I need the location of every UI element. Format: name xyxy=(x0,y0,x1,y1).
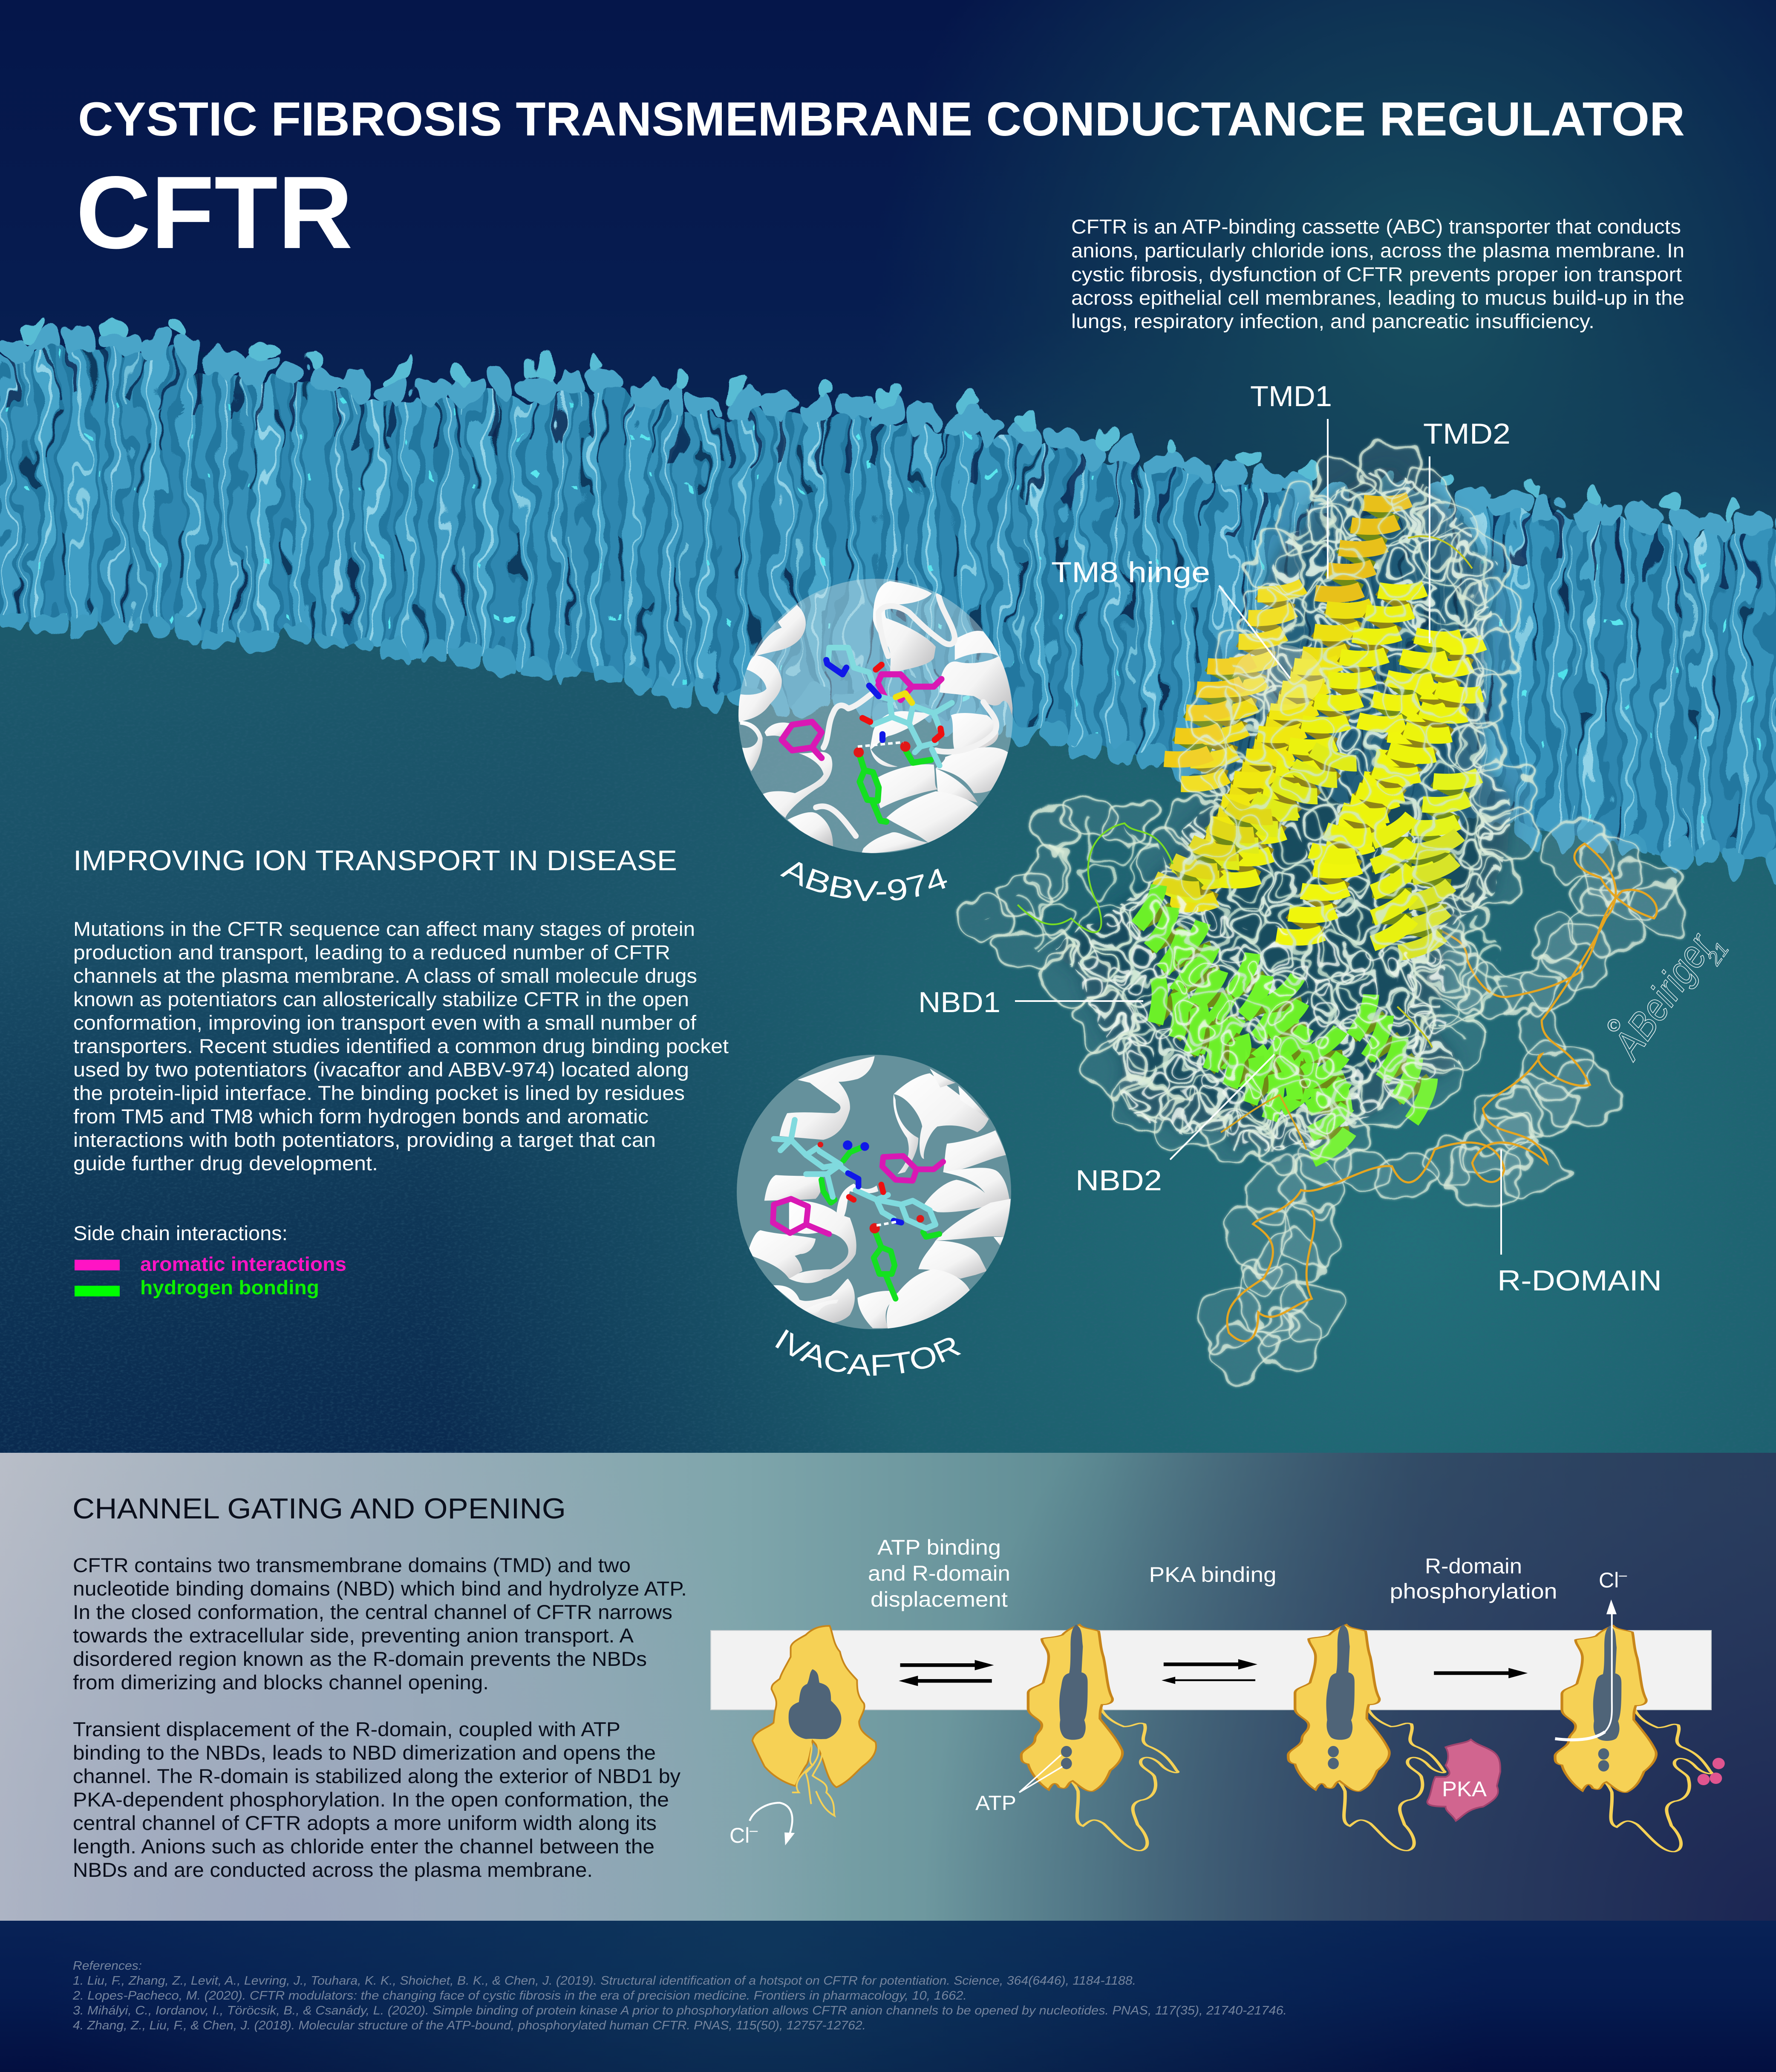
body text: from TM5 and TM8 which form hydrogen bonds and aromatic xyxy=(73,1105,649,1128)
body text: disordered region known as the R-domain prevents the NBDs xyxy=(73,1648,647,1670)
body text: channel. The R-domain is stabilized along the exterior of NBD1 by xyxy=(73,1765,681,1787)
panel: improving ion transport xyxy=(73,845,729,1299)
diagram: closed state xyxy=(752,1626,876,1816)
title: CYSTIC FIBROSIS TRANSMEMBRANE CONDUCTANCE REGULATOR xyxy=(78,92,1685,146)
intro paragraph: across epithelial cell membranes, leading to mucus build-up in the xyxy=(1071,286,1684,309)
TMD helices xyxy=(1155,481,1484,959)
body text: conformation, improving ion transport even with a small number of xyxy=(73,1011,697,1034)
intro paragraph: cystic fibrosis, dysfunction of CFTR prevents proper ion transport xyxy=(1071,263,1682,286)
diagram labels xyxy=(729,1535,1627,1847)
references: 4. Zhang, Z., Liu, F., & Chen, J. (2018). Molecular structure of the ATP-bound, phosphorylated human CFTR. PNAS, 115(50), 12757-12762. xyxy=(73,2019,866,2032)
diagram labels: – xyxy=(1619,1567,1627,1583)
body text: known as potentiators can allosterically stabilize CFTR in the open xyxy=(73,988,689,1010)
body text: Transient displacement of the R-domain, coupled with ATP xyxy=(73,1718,620,1740)
diagram labels: Cl xyxy=(1599,1568,1619,1592)
diagram labels: PKA xyxy=(1442,1777,1487,1801)
body text xyxy=(73,918,729,1175)
signature: ABeiriger xyxy=(1604,925,1722,1068)
structure labels and leader lines: NBD2 xyxy=(1075,1164,1162,1197)
body text: In the closed conformation, the central channel of CFTR narrows xyxy=(73,1601,672,1623)
body text: CFTR contains two transmembrane domains (TMD) and two xyxy=(73,1554,631,1576)
diagram labels: Cl xyxy=(729,1824,750,1847)
callout: ivacaftor binding pocket xyxy=(737,1055,1011,1382)
body text: NBDs and are conducted across the plasma membrane. xyxy=(73,1858,593,1881)
intro paragraph: CFTR is an ATP-binding cassette (ABC) transporter that conducts xyxy=(1071,215,1681,238)
legend xyxy=(73,1222,346,1299)
white protein ribbons xyxy=(738,581,1013,853)
body text: guide further drug development. xyxy=(73,1152,378,1175)
signature: 21 xyxy=(1702,938,1733,970)
ABBV-974 ligand and side chains xyxy=(781,648,952,822)
CFTR protein structure xyxy=(963,443,1733,1379)
intro paragraph: lungs, respiratory infection, and pancreatic insufficiency. xyxy=(1071,310,1594,332)
body text: binding to the NBDs, leads to NBD dimerization and opens the xyxy=(73,1741,656,1764)
membrane band xyxy=(711,1630,1711,1710)
diagram labels: R-domain xyxy=(1425,1554,1522,1578)
references: 1. Liu, F., Zhang, Z., Levit, A., Levring, J., Touhara, K. K., Shoichet, B. K., & Chen, J. (2019). Structural identification of a hotspot on CFTR for potentiation. Science, 364(6446), 1184-1188. xyxy=(73,1974,1136,1988)
references: 2. Lopes-Pacheco, M. (2020). CFTR modulators: the changing face of cystic fibrosis in the era of precision medicine. Frontiers in pharmacology, 10, 1662. xyxy=(72,1989,967,2003)
legend: Side chain interactions: xyxy=(73,1222,288,1244)
body text: the protein-lipid interface. The binding pocket is lined by residues xyxy=(73,1082,685,1104)
heading: CHANNEL GATING AND OPENING xyxy=(72,1492,566,1525)
background xyxy=(0,0,1776,1457)
callout: ABBV-974 binding pocket xyxy=(738,579,1013,908)
structure labels and leader lines: TMD2 xyxy=(1423,418,1511,450)
ivacaftor label: IVACAFTOR xyxy=(769,1322,966,1382)
R-domain surface xyxy=(1196,821,1685,1379)
diagram: PKA-bound state xyxy=(1288,1625,1500,1850)
diagram labels: ATP binding xyxy=(877,1535,1001,1559)
diagram labels: displacement xyxy=(871,1587,1008,1611)
white protein ribbons xyxy=(749,1056,1011,1329)
acronym: CFTR xyxy=(76,155,353,270)
references xyxy=(72,1959,1287,2032)
body text: central channel of CFTR adopts a more uniform width along its xyxy=(73,1812,657,1834)
body text: nucleotide binding domains (NBD) which bind and hydrolyze ATP. xyxy=(73,1577,687,1600)
equilibrium arrows xyxy=(899,1659,1528,1686)
body text: transporters. Recent studies identified a common drug binding pocket xyxy=(73,1035,729,1057)
R-domain chain xyxy=(1227,844,1657,1341)
structure labels and leader lines: NBD1 xyxy=(918,986,1000,1019)
body text: length. Anions such as chloride enter the channel between the xyxy=(73,1835,654,1858)
diagram labels: and R-domain xyxy=(868,1561,1010,1585)
heading: IMPROVING ION TRANSPORT IN DISEASE xyxy=(73,845,677,877)
structure labels and leader lines: TM8 hinge xyxy=(1051,556,1210,589)
body text: Mutations in the CFTR sequence can affect many stages of protein xyxy=(73,918,695,940)
TM8 hinge highlight xyxy=(1234,644,1323,711)
thin backbone loops xyxy=(1018,536,1472,1149)
diagram: ATP-bound state xyxy=(1019,1625,1178,1850)
protein surface outline xyxy=(963,443,1536,1172)
references: References: xyxy=(73,1959,142,1973)
body text: towards the extracellular side, preventing anion transport. A xyxy=(73,1624,634,1647)
diagram labels: ATP xyxy=(975,1792,1016,1815)
structure labels and leader lines: R-DOMAIN xyxy=(1497,1264,1662,1297)
references: 3. Mihályi, C., Iordanov, I., Töröcsik, B., & Csanády, L. (2020). Simple binding of protein kinase A prior to phosphorylation allows CFTR anion channels to be opened by nucleotides. PNAS, 117(35), 21740-21746. xyxy=(73,2004,1287,2017)
diagram labels: PKA binding xyxy=(1149,1563,1277,1587)
body text: channels at the plasma membrane. A class of small molecule drugs xyxy=(73,964,697,987)
diagram labels: phosphorylation xyxy=(1390,1579,1557,1603)
intro paragraph: anions, particularly chloride ions, across the plasma membrane. In xyxy=(1071,239,1684,262)
structure labels and leader lines: TMD1 xyxy=(1250,380,1332,413)
diagram: open phosphorylated state xyxy=(1555,1599,1725,1852)
protein surface mesh xyxy=(1055,460,1510,1156)
body text: from dimerizing and blocks channel opening. xyxy=(73,1671,489,1694)
signature: © xyxy=(1607,1015,1620,1035)
body text: used by two potentiators (ivacaftor and ABBV-974) located along xyxy=(73,1058,689,1081)
ivacaftor ligand and side chains xyxy=(773,1120,943,1299)
lipid bilayer membrane xyxy=(0,320,1776,865)
body text: production and transport, leading to a reduced number of CFTR xyxy=(73,941,670,964)
protein inner mesh xyxy=(986,460,1510,1156)
diagram labels: – xyxy=(750,1822,758,1838)
structure labels and leader lines xyxy=(918,380,1662,1297)
ABBV-974 label: ABBV-974 xyxy=(777,851,952,908)
panel: channel gating and opening xyxy=(0,1453,1776,1921)
chloride arrow closed xyxy=(750,1803,795,1845)
legend: aromatic interactions xyxy=(140,1253,346,1275)
legend: hydrogen bonding xyxy=(140,1276,319,1299)
title xyxy=(76,92,1685,270)
body text xyxy=(73,1554,687,1881)
NBD helices xyxy=(1125,885,1444,1160)
intro paragraph xyxy=(1071,215,1684,332)
body text: PKA-dependent phosphorylation. In the open conformation, the xyxy=(73,1788,669,1811)
protein body tint xyxy=(1055,460,1510,1156)
footer xyxy=(0,1921,1776,2072)
body text: interactions with both potentiators, providing a target that can xyxy=(73,1128,656,1151)
